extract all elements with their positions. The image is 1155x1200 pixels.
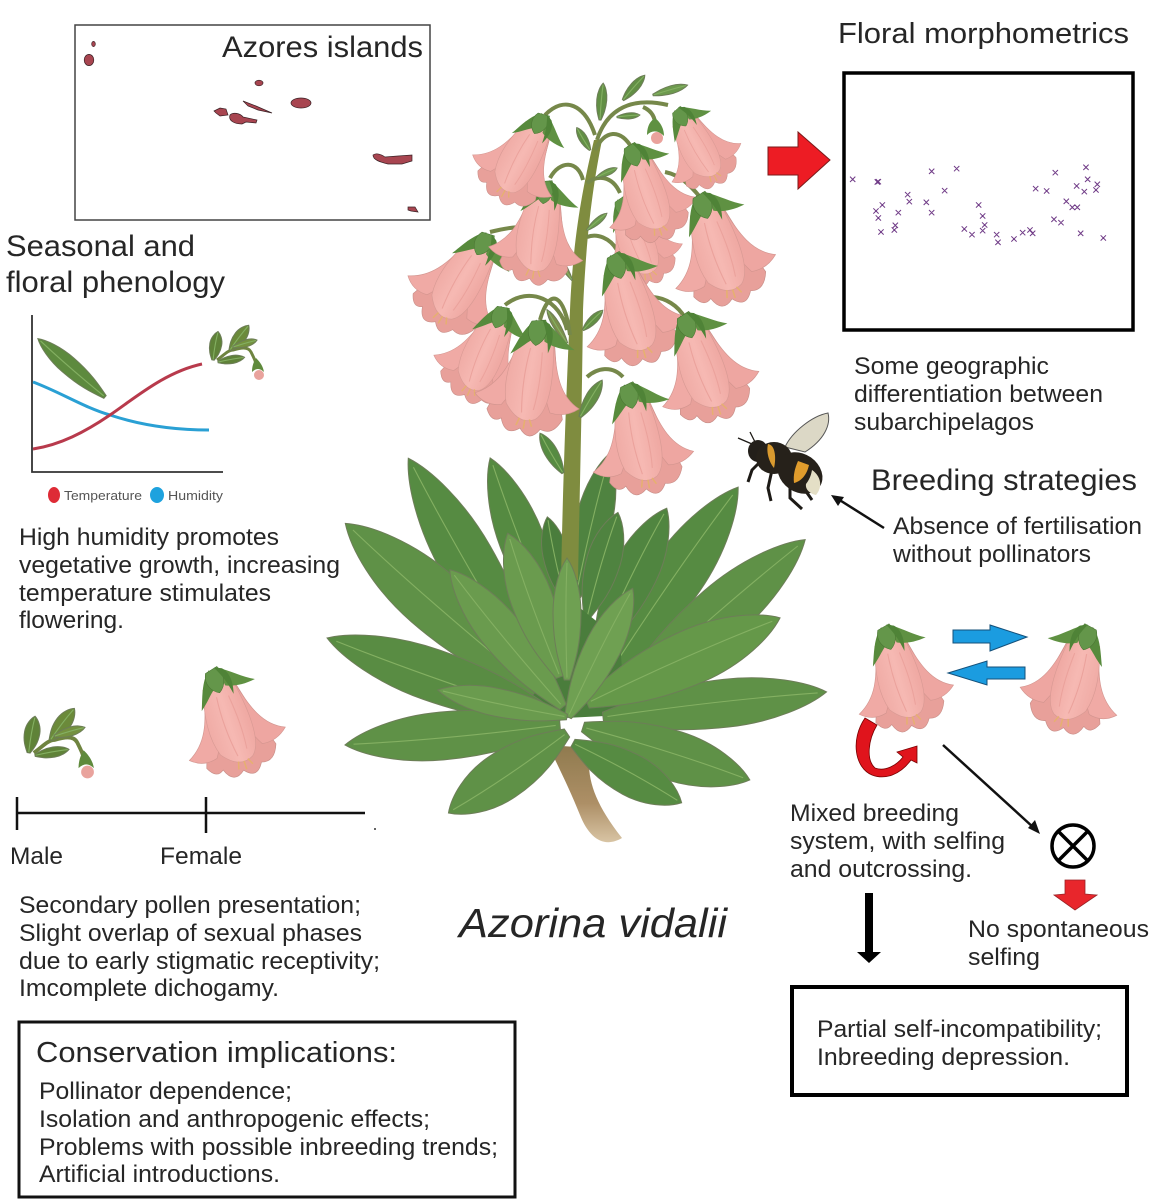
heading: Seasonal and floral phenology <box>6 230 225 299</box>
panel: Azores islands map <box>75 25 430 220</box>
stem <box>561 140 602 580</box>
text: geographic differentiation: Some geographic <box>854 353 1049 380</box>
text: sexual phases description: due to early stigmatic receptivity; <box>19 948 380 975</box>
timeline: male and female phases <box>10 797 376 870</box>
timeline: male and female phases: Male <box>10 843 63 870</box>
text: geographic differentiation <box>854 353 1103 436</box>
heading: breeding strategies: Breeding strategies <box>871 464 1137 497</box>
text: mixed breeding system: and outcrossing. <box>790 856 972 883</box>
legend: Humidity <box>168 488 224 503</box>
heading: Seasonal and floral phenology: Seasonal and <box>6 230 195 263</box>
illustration: Azorina vidalii plant <box>318 72 829 842</box>
text: phenology description: flowering. <box>19 607 124 634</box>
panel: conservation implications: Artificial introductions. <box>39 1161 280 1188</box>
flowers <box>392 89 786 504</box>
icon: leaf <box>32 332 111 404</box>
text: no spontaneous selfing <box>968 916 1149 971</box>
text: phenology description: High humidity promotes <box>19 524 279 551</box>
icon: bumblebee <box>738 413 831 509</box>
text: absence of fertilisation: without pollinators <box>892 541 1091 568</box>
arrow: selfing <box>856 718 917 777</box>
text: phenology description: vegetative growth, increasing <box>19 552 340 579</box>
text: mixed breeding system: Mixed breeding <box>790 800 959 827</box>
text: no spontaneous selfing: No spontaneous <box>968 916 1149 943</box>
arrow: to no spontaneous selfing <box>943 745 1040 834</box>
text: absence of fertilisation <box>892 513 1142 568</box>
line: temperature <box>33 364 202 449</box>
panel: self-incompatibility <box>792 987 1127 1095</box>
panel: conservation implications: Pollinator dependence; <box>39 1078 292 1105</box>
legend: Temperature <box>64 488 142 503</box>
panel: conservation implications: Isolation and anthropogenic effects; <box>39 1106 430 1133</box>
arrow: to bee <box>831 495 884 528</box>
pedicels <box>490 102 700 377</box>
legend <box>48 487 224 503</box>
panel: conservation implications: Conservation implications: <box>36 1037 397 1069</box>
panel: conservation implications: Problems with possible inbreeding trends; <box>39 1134 498 1161</box>
panel: self-incompatibility: Inbreeding depression. <box>817 1044 1070 1071</box>
text: sexual phases description: Imcomplete dichogamy. <box>19 975 279 1002</box>
icon: crossed circle <box>1052 825 1094 867</box>
timeline: male and female phases: Female <box>160 843 242 870</box>
text: sexual phases description <box>19 892 380 1002</box>
root <box>548 745 622 842</box>
text: geographic differentiation: subarchipelagos <box>854 409 1034 436</box>
text: phenology description <box>19 524 340 634</box>
heading: floral morphometrics: Floral morphometrics <box>838 18 1129 50</box>
line: humidity <box>33 382 209 430</box>
icon: female phase flower <box>164 652 296 791</box>
text: no spontaneous selfing: selfing <box>968 944 1040 971</box>
icon: male phase shoot <box>21 704 94 778</box>
text: absence of fertilisation: Absence of fertilisation <box>893 513 1142 540</box>
text: mixed breeding system: system, with selfing <box>790 828 1005 855</box>
icon: flowering shoot <box>207 322 264 380</box>
text: phenology description: temperature stimulates <box>19 580 271 607</box>
chart: temperature and humidity <box>32 315 264 503</box>
icon: left flower <box>838 611 963 744</box>
text: sexual phases description: Slight overlap of sexual phases <box>19 920 362 947</box>
arrow: red down <box>1054 880 1097 910</box>
icon: right flower <box>1011 612 1138 746</box>
arrow: black down <box>857 893 881 963</box>
panel: morphometrics scatter plot <box>844 73 1133 330</box>
map: islands <box>84 41 418 212</box>
arrow: outcrossing right <box>953 625 1027 651</box>
panel: self-incompatibility: Partial self-incompatibility; <box>817 1016 1102 1043</box>
text: geographic differentiation: differentiation between <box>854 381 1103 408</box>
panel: conservation implications <box>19 1022 515 1197</box>
arrow: outcrossing left <box>948 661 1025 685</box>
heading: Seasonal and floral phenology: floral phenology <box>6 266 225 299</box>
species name: Azorina vidalii <box>456 900 729 946</box>
stem leaflets <box>534 72 689 476</box>
text: mixed breeding system <box>790 800 1005 883</box>
front leaves <box>318 500 829 833</box>
back leaves <box>384 445 761 720</box>
scatter points <box>850 165 1106 245</box>
heading: Azores islands: Azores islands <box>222 31 423 64</box>
arrow: plant to morphometrics <box>768 132 830 189</box>
text: sexual phases description: Secondary pollen presentation; <box>19 892 361 919</box>
